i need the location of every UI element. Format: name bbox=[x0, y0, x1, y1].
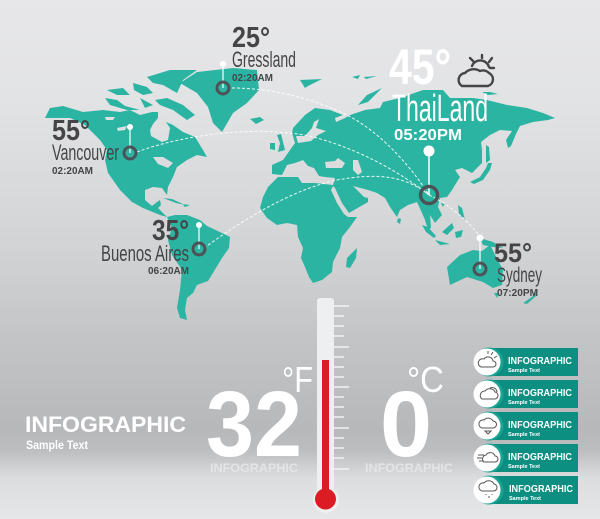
map: Cuba and Caribbean bbox=[163, 198, 190, 207]
legend panel 1: Sample Text bbox=[508, 368, 540, 374]
legend panel 3 bbox=[474, 412, 578, 440]
celsius reading bbox=[365, 359, 453, 476]
map: Novaya Zemlya bbox=[358, 88, 382, 105]
label: Vancouver: 02:20AM bbox=[52, 166, 93, 177]
map: North America bbox=[45, 106, 207, 217]
label: Buenos Aires: Buenos Aires bbox=[101, 241, 189, 266]
legend panel 4: Sample Text bbox=[508, 464, 540, 470]
legend panel 5 bbox=[474, 476, 578, 504]
fahrenheit reading: °F bbox=[282, 359, 313, 400]
legend panel 3: Sample Text bbox=[508, 432, 540, 438]
thermometer tube bbox=[317, 298, 334, 498]
celsius reading: INFOGRAPHIC bbox=[365, 461, 453, 475]
map: Arctic archipelagos bbox=[300, 75, 498, 95]
map: Sri Lanka and Hainan bbox=[397, 203, 445, 224]
icon: cloud bbox=[480, 388, 498, 399]
label: Vancouver: Vancouver bbox=[52, 140, 119, 165]
label: ThaiLand: ThaiLand bbox=[392, 88, 488, 130]
legend panel 5: Sample Text bbox=[509, 496, 541, 502]
map: Canadian Arctic islands bbox=[105, 70, 197, 120]
map: Sakhalin bbox=[486, 145, 490, 163]
legend panel 3: INFOGRAPHIC bbox=[508, 420, 572, 431]
map: South America bbox=[167, 215, 230, 320]
legend panel 1: INFOGRAPHIC bbox=[508, 356, 572, 367]
heading: INFOGRAPHIC: Sample Text bbox=[26, 440, 88, 452]
marker: Gressland bbox=[217, 61, 229, 94]
label: Gressland: Gressland bbox=[232, 47, 296, 72]
map: Iceland bbox=[250, 117, 264, 124]
label: Gressland bbox=[232, 22, 296, 84]
label: Sydney: Sydney bbox=[497, 264, 542, 287]
icon: snow cloud bbox=[479, 418, 496, 434]
legend panel 2 bbox=[474, 380, 578, 408]
legend panel 1 bbox=[474, 348, 578, 376]
legend panel 4: INFOGRAPHIC bbox=[508, 452, 572, 463]
icon: sun and cloud bbox=[478, 351, 497, 367]
fahrenheit reading: 32 bbox=[206, 372, 302, 476]
legend panel 2: Sample Text bbox=[508, 400, 540, 406]
legend panel 4 bbox=[474, 444, 578, 472]
map: Eurasia and Africa bbox=[260, 90, 555, 283]
label: ThaiLand: 05:20PM bbox=[394, 127, 462, 144]
label: ThaiLand: 45° bbox=[389, 39, 451, 95]
icon: rain cloud bbox=[479, 481, 497, 498]
thermometer bbox=[313, 298, 349, 513]
marker: Buenos Aires bbox=[193, 222, 205, 255]
map: Madagascar bbox=[346, 248, 357, 268]
label: Buenos Aires: 35° bbox=[152, 215, 189, 247]
legend panel 5: INFOGRAPHIC bbox=[509, 484, 573, 495]
label: Vancouver bbox=[52, 115, 119, 177]
map: New Guinea bbox=[480, 238, 503, 248]
label: Sydney: 55° bbox=[494, 238, 532, 268]
legend panel 2: INFOGRAPHIC bbox=[508, 388, 572, 399]
label: Buenos Aires bbox=[101, 215, 189, 277]
fahrenheit reading: INFOGRAPHIC bbox=[210, 461, 298, 475]
world map bbox=[45, 68, 555, 320]
heading: INFOGRAPHIC: INFOGRAPHIC bbox=[25, 412, 186, 437]
icon: wind cloud bbox=[477, 453, 498, 462]
map: Greenland bbox=[180, 68, 259, 132]
dashed flight routes bbox=[137, 88, 480, 248]
celsius reading: 0 bbox=[380, 372, 432, 476]
label: Vancouver: 55° bbox=[52, 115, 90, 147]
label: Buenos Aires: 06:20AM bbox=[148, 266, 189, 277]
map: British Isles bbox=[270, 134, 285, 152]
marker: Vancouver bbox=[124, 124, 136, 159]
marker: Sydney bbox=[474, 234, 486, 275]
map: Tasmania and New Zealand bbox=[494, 290, 538, 304]
icon: sun behind cloud bbox=[459, 55, 494, 86]
map: Australia bbox=[447, 245, 503, 288]
label: ThaiLand bbox=[389, 39, 488, 144]
label: Gressland: 25° bbox=[232, 22, 270, 54]
thermometer mercury bbox=[322, 360, 329, 495]
thermometer scale bbox=[334, 306, 349, 469]
label: Sydney bbox=[494, 238, 542, 299]
label: Gressland: 02:20AM bbox=[232, 73, 273, 84]
map: Japan bbox=[470, 163, 492, 184]
label: Sydney: 07:20PM bbox=[497, 288, 538, 299]
map: Indonesia and Philippines bbox=[422, 205, 465, 245]
celsius reading: °C bbox=[407, 359, 444, 400]
marker: ThaiLand bbox=[420, 146, 438, 204]
heading: INFOGRAPHIC bbox=[25, 412, 186, 452]
